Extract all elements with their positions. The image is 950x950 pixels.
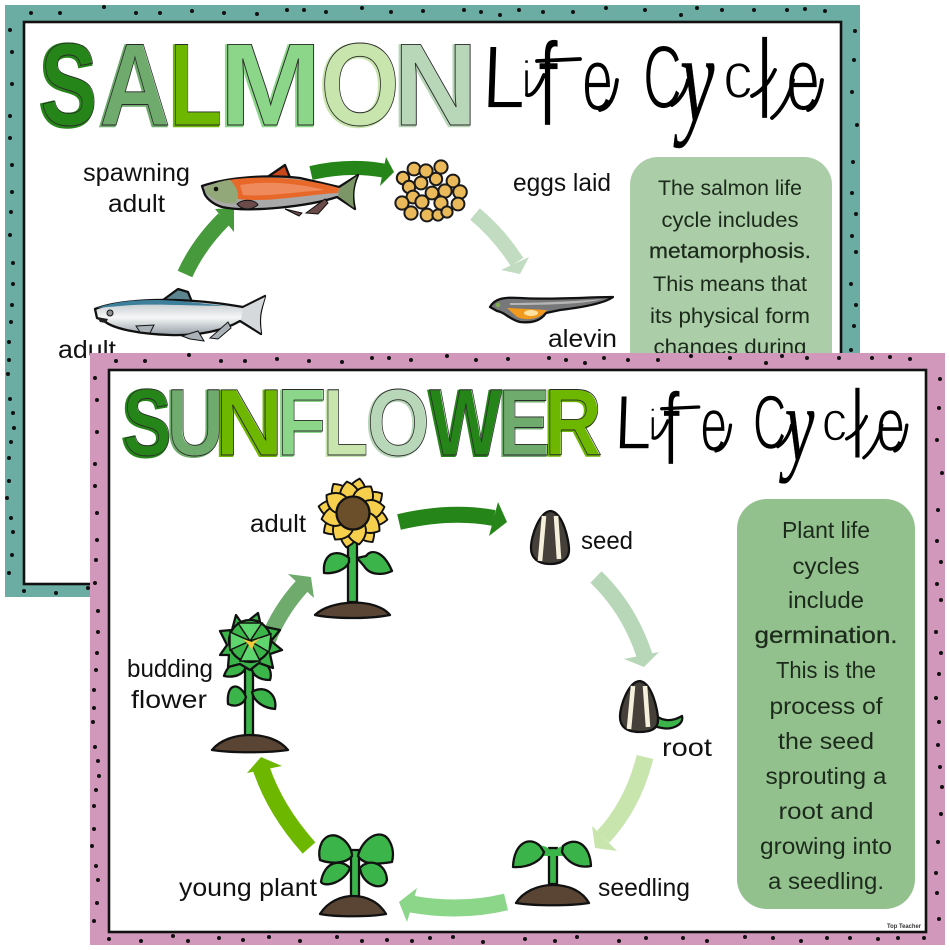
label: adult: adult: [58, 336, 116, 364]
arrow: root to seedling: [592, 757, 645, 851]
panel text: [754, 517, 898, 894]
title: Life Cycle script: y: [673, 10, 715, 149]
stem and leaves: [324, 540, 392, 602]
title: SALMON: N: [392, 20, 476, 151]
icon: salmon eggs: [395, 160, 467, 221]
label: spawning adult: spawning: [83, 159, 190, 187]
title: SUNFLOWER: S: [123, 369, 172, 475]
panel text: changes during: [654, 336, 806, 359]
icon: seedling: [513, 841, 591, 905]
title: Life Cycle script: C: [753, 379, 786, 466]
title: SUNFLOWER: N: [215, 370, 284, 476]
title: SUNFLOWER: F: [276, 370, 325, 476]
title: Life Cycle script: [613, 365, 907, 488]
panel text: process of: [770, 693, 883, 719]
panel text: germination.: [754, 622, 898, 648]
label: budding flower: [127, 655, 213, 714]
petals: [317, 477, 389, 549]
label: budding flower: flower: [131, 686, 207, 714]
title: SALMON: A: [98, 20, 169, 151]
arrow: eggs to alevin: [475, 214, 529, 274]
panel: germination note: [737, 499, 915, 909]
title: SALMON: O: [319, 21, 398, 152]
arrow: young plant to budding flower: [247, 757, 309, 848]
poster: salmon life cycle: [5, 5, 860, 597]
brand mark: Top Teacher: Top Teacher: [887, 923, 921, 930]
icon: budding sunflower: [212, 613, 288, 752]
title: SUNFLOWER: S: [122, 370, 170, 476]
title: SUNFLOWER: O: [367, 369, 430, 475]
label: seed: seed: [581, 527, 633, 555]
panel text: The salmon life: [658, 177, 802, 200]
title: Life Cycle script: e: [582, 28, 613, 129]
panel text: sprouting a: [766, 763, 887, 789]
label: eggs laid: eggs laid: [513, 169, 611, 197]
soil mound: [315, 603, 390, 618]
title: Life Cycle script: y: [779, 365, 815, 484]
title: SALMON: L: [168, 20, 221, 151]
title: Life Cycle script: l: [757, 16, 772, 143]
title: SUNFLOWER: [122, 369, 602, 477]
title: SALMON: S: [39, 20, 96, 151]
arrow: adult to spawning adult: [185, 208, 234, 274]
icon: adult silver salmon: [95, 289, 265, 341]
label: adult: adult: [250, 510, 306, 538]
panel text: This is the: [776, 657, 876, 683]
title: Life Cycle script: i: [521, 51, 532, 107]
title: Life Cycle script: f: [538, 17, 558, 151]
panel text: This means that: [653, 273, 807, 296]
title: SUNFLOWER: N: [214, 371, 282, 477]
title: SALMON: M: [218, 21, 320, 151]
title: Life Cycle script: e: [786, 29, 820, 130]
panel: salmon metamorphosis note: [630, 157, 832, 417]
title: SALMON: S: [40, 19, 97, 150]
title: SUNFLOWER: U: [166, 371, 222, 477]
label: root: root: [662, 734, 712, 762]
icon: seed with root: [620, 681, 682, 732]
title: Life Cycle script: f: [663, 372, 680, 488]
salmon poster border: [5, 5, 860, 597]
icon: young plant: [319, 835, 393, 916]
title: SALMON: M: [220, 20, 322, 150]
icon: red spawning salmon: [202, 165, 358, 216]
title: SUNFLOWER: W: [428, 371, 501, 477]
arrow: spawning adult to eggs: [311, 157, 394, 186]
icon: adult sunflower: [315, 477, 392, 618]
flower centre: [336, 496, 370, 530]
panel text: [649, 177, 811, 359]
arrow: seed to root: [596, 577, 659, 667]
panel text: cycle includes: [662, 209, 798, 232]
label: budding flower: budding: [127, 655, 213, 683]
title: SALMON: O: [320, 20, 400, 151]
title: SUNFLOWER: U: [167, 370, 224, 476]
panel text: Plant life: [782, 517, 870, 543]
title: Life Cycle script: e: [876, 382, 905, 468]
title: SUNFLOWER: E: [497, 371, 549, 477]
panel text: the seed: [778, 728, 874, 754]
title: SUNFLOWER: F: [277, 369, 326, 475]
panel text: metamorphosis.: [649, 240, 811, 263]
title: SUNFLOWER: W: [430, 370, 502, 476]
arrow: budding flower to adult: [268, 574, 314, 640]
title: Life Cycle script: l: [851, 371, 864, 480]
title: SUNFLOWER: R: [544, 369, 602, 476]
title: Life Cycle script: e: [700, 381, 727, 468]
panel text: growing into: [760, 833, 892, 859]
icon: alevin: [490, 297, 613, 322]
label: spawning adult: adult: [108, 190, 165, 218]
arrow: seedling to young plant: [399, 888, 506, 922]
title: Life Cycle script: i: [648, 401, 658, 449]
title: SUNFLOWER: R: [543, 370, 601, 477]
panel text: its physical form: [650, 305, 810, 328]
panel text: cycles: [792, 553, 860, 579]
title: Life Cycle script: c: [723, 39, 753, 113]
title: SUNFLOWER: E: [498, 370, 550, 476]
label: young plant: young plant: [179, 874, 317, 902]
arrow: adult to seed: [399, 502, 507, 536]
title: SUNFLOWER: L: [322, 371, 367, 477]
label: alevin: alevin: [548, 325, 617, 353]
title: Life Cycle script: L: [613, 380, 654, 466]
label: spawning adult: [83, 159, 190, 218]
panel text: a seedling.: [768, 868, 884, 894]
title: Life Cycle script: c: [822, 390, 847, 453]
title: SALMON: [39, 19, 478, 152]
panel text: include: [788, 587, 864, 613]
icon: seed: [531, 511, 569, 564]
salmon poster white frame: [24, 22, 841, 584]
title: SUNFLOWER: O: [366, 370, 428, 476]
panel text: root and: [778, 798, 874, 824]
sunflower poster white frame: [109, 370, 926, 932]
title: SALMON: L: [170, 19, 222, 150]
title: SALMON: A: [100, 19, 170, 150]
title: SALMON: N: [394, 19, 478, 150]
title: Life Cycle script: C: [643, 27, 682, 127]
label: seedling: seedling: [598, 874, 690, 902]
title: SUNFLOWER: L: [323, 370, 368, 476]
title: Life Cycle script: [480, 10, 822, 151]
title: Life Cycle script: L: [480, 26, 528, 127]
sunflower poster border: [90, 353, 945, 945]
poster: sunflower life cycle: [90, 353, 945, 945]
